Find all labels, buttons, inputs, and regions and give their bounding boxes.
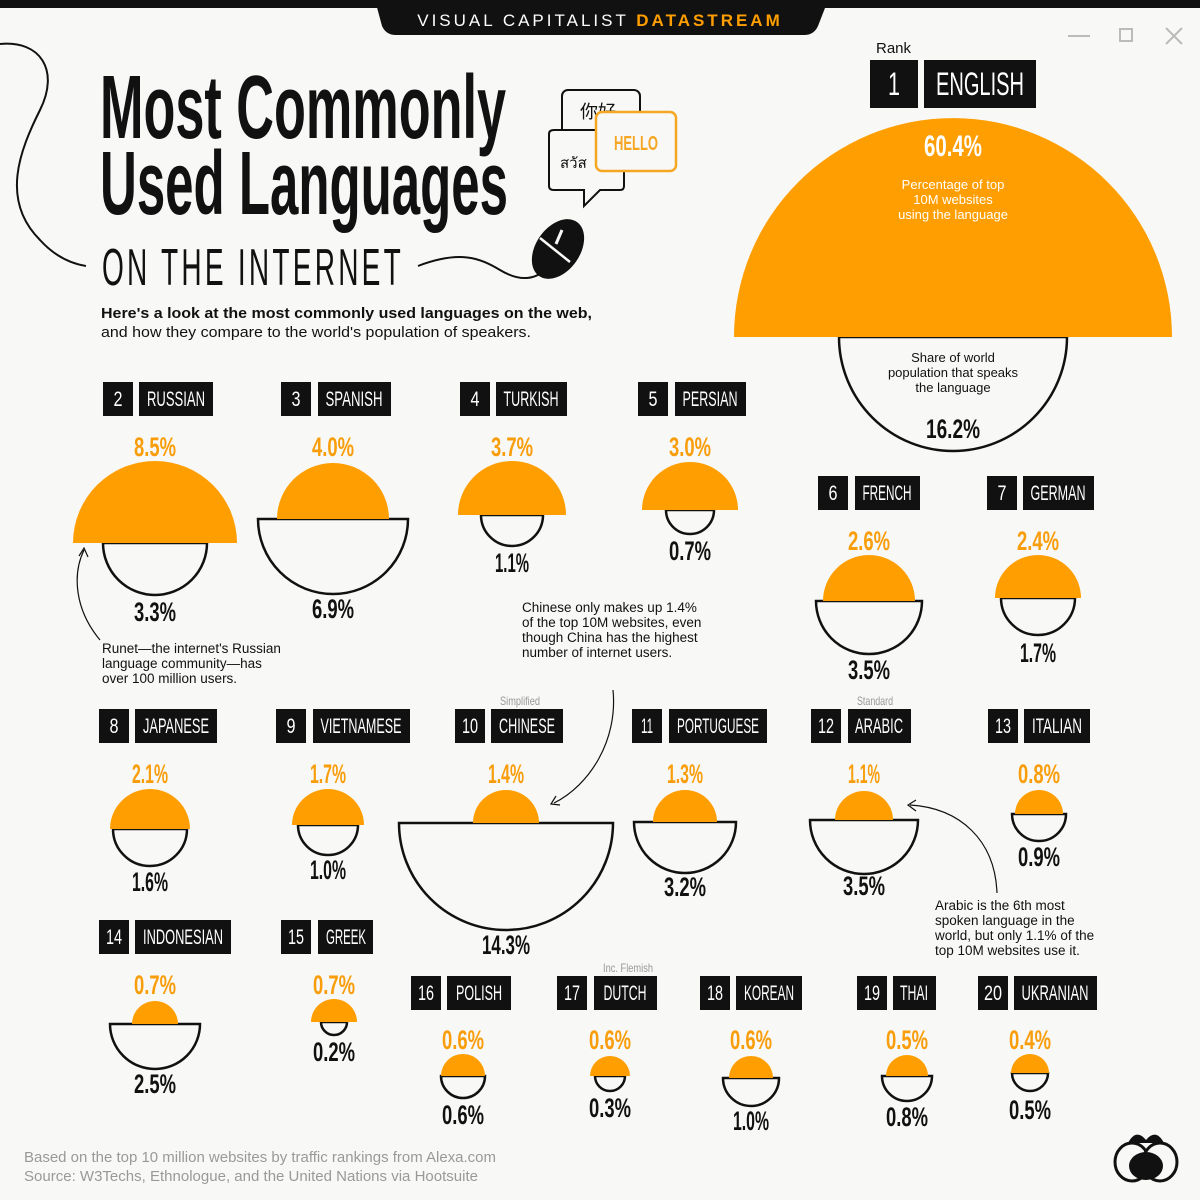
window controls [1068,28,1182,44]
callout: arabic: top 10M websites use it. [935,943,1080,958]
footer source text: Source: W3Techs, Ethnologue, and the United Nations via Hootsuite [24,1168,478,1185]
panel: turkish: TURKISH [504,388,558,411]
callout: runet: over 100 million users. [102,671,237,686]
subtitle text: and how they compare to the world's population of speakers. [101,324,531,341]
callout: chinese: though China has the highest [522,630,698,645]
panel: greek: 15 [288,926,304,949]
panel: chinese: Simplified [500,694,540,708]
panel: russian: 3.3% [134,597,176,627]
panel: italian: 13 [995,715,1011,738]
panel: chinese: 1.4% [488,759,524,789]
panel: dutch: 17 [564,982,580,1005]
panel: russian [73,382,237,627]
icon: logo [1115,1135,1177,1181]
panel: japanese: 8 [110,715,118,738]
callout: chinese [522,600,701,805]
panel: english: Percentage of top [902,177,1004,192]
panel: korean [700,976,802,1136]
panel: english: 1 [888,66,900,102]
decorative cable line [0,44,86,266]
callout: arabic: spoken language in the [935,913,1075,928]
panel: spanish: SPANISH [326,388,382,411]
panel: chinese: 14.3% [482,930,530,960]
panel: persian: 3.0% [669,432,711,462]
panel: english: ENGLISH [936,66,1024,102]
panel: korean: 0.6% [730,1025,772,1055]
panel: dutch: Inc. Flemish [603,961,653,975]
panel: italian: 0.8% [1018,759,1060,789]
panel: italian: 0.9% [1018,842,1060,872]
panel: indonesian: 0.7% [134,970,176,1000]
panel: english: the language [915,380,991,395]
subtitle text: Here's a look at the most commonly used languages on the web, [101,305,592,322]
panel: german: 2.4% [1017,526,1059,556]
icon: speech bubbles and mouse: HELLO [614,133,658,155]
panel: dutch: 0.3% [589,1093,631,1123]
panel: persian [638,382,746,566]
panel: thai [857,976,936,1132]
panel: english: using the language [898,207,1008,222]
panel: english: 16.2% [926,414,980,444]
panel: japanese: JAPANESE [143,715,209,738]
panel: english: population that speaks [888,365,1019,380]
panel: arabic: Standard [857,694,893,708]
panel: turkish: 3.7% [491,432,533,462]
panel: thai: 19 [864,982,880,1005]
panel: greek: 0.2% [313,1037,355,1067]
callout: chinese: Chinese only makes up 1.4% [522,600,697,615]
icon: speech bubbles and mouse: 你好 [580,98,616,124]
title: Most Commonly [100,58,506,158]
panel: english [734,40,1172,451]
panel: turkish [458,382,567,578]
panel: arabic [810,694,918,901]
panel: korean: 1.0% [733,1106,769,1136]
panel: dutch: DUTCH [604,982,646,1005]
panel: greek: GREEK [326,926,366,949]
panel: arabic: 3.5% [843,871,885,901]
title [100,58,508,297]
panel: italian: ITALIAN [1032,715,1082,738]
panel: arabic: 12 [818,715,834,738]
panel: thai: 0.5% [886,1025,928,1055]
panel: portuguese: 1.3% [667,759,703,789]
panel: dutch: 0.6% [589,1025,631,1055]
panel: ukranian: 0.5% [1009,1095,1051,1125]
panel: korean: KOREAN [744,982,794,1005]
panel: russian: RUSSIAN [147,388,205,411]
panel: persian: 0.7% [669,536,711,566]
panel: polish: 16 [418,982,434,1005]
panel: spanish: 3 [292,388,300,411]
panel: greek: 0.7% [313,970,355,1000]
panel: polish [411,976,511,1130]
panel: french: 2.6% [848,526,890,556]
panel: german [987,476,1094,668]
footer source text [24,1149,496,1185]
title: Used Languages [100,134,508,234]
panel: turkish: 1.1% [495,548,529,578]
panel: chinese: 10 [462,715,478,738]
panel: german: 1.7% [1020,638,1056,668]
panel: ukranian: UKRANIAN [1022,982,1088,1005]
panel: japanese: 2.1% [132,759,168,789]
panel: indonesian: INDONESIAN [143,926,223,949]
panel: french: FRENCH [862,482,912,505]
panel: portuguese: 11 [641,715,653,738]
header bar: VISUAL CAPITALIST DATASTREAM [417,11,783,30]
panel: german: 7 [998,482,1006,505]
icon: speech bubbles and mouse [521,90,676,289]
panel: thai: THAI [900,982,928,1005]
panel: french [816,476,922,685]
panel: english: 10M websites [913,192,993,207]
panel: japanese: 1.6% [132,867,168,897]
callout: runet [77,548,281,686]
callout: chinese: of the top 10M websites, even [522,615,701,630]
panel: chinese [399,694,613,960]
panel: ukranian [978,976,1097,1125]
header bar [0,0,1200,35]
panel: spanish: 6.9% [312,594,354,624]
title: ON THE INTERNET [102,239,404,297]
panel: portuguese: 3.2% [664,872,706,902]
panel: portuguese [632,709,767,902]
panel: turkish: 4 [470,388,480,411]
callout: arabic: world, but only 1.1% of the [934,928,1094,943]
icon: speech bubbles and mouse: สวัส [560,154,587,172]
subtitle text [101,305,592,341]
panel: russian: 2 [114,388,122,411]
panel: spanish [258,382,408,624]
callout: runet: language community—has [102,656,262,671]
panel: french: 6 [828,482,838,505]
panel: spanish: 4.0% [312,432,354,462]
panel: english: Share of world [911,350,995,365]
panel: italian [988,709,1090,872]
panel: indonesian: 2.5% [134,1069,176,1099]
panel: dutch [557,961,657,1123]
footer source text: Based on the top 10 million websites by traffic rankings from Alexa.com [24,1149,496,1166]
callout: chinese: number of internet users. [522,645,672,660]
panel: indonesian [99,920,231,1099]
panel: polish: 0.6% [442,1025,484,1055]
panel: arabic: ARABIC [855,715,903,738]
panel: arabic: 1.1% [848,759,880,789]
panel: english: 60.4% [924,130,982,163]
panel: russian: 8.5% [134,432,176,462]
panel: polish: 0.6% [442,1100,484,1130]
panel: korean: 18 [707,982,723,1005]
panel: chinese: CHINESE [499,715,555,738]
panel: thai: 0.8% [886,1102,928,1132]
panel: vietnamese [276,709,410,885]
panel: vietnamese: 1.0% [310,855,346,885]
panel: japanese [99,709,217,897]
panel: french: 3.5% [848,655,890,685]
panel: english: Rank [876,40,912,57]
panel: persian: 5 [648,388,658,411]
callout: arabic: Arabic is the 6th most [935,898,1065,913]
panel: persian: PERSIAN [682,388,738,411]
panel: vietnamese: VIETNAMESE [320,715,402,738]
panel: vietnamese: 1.7% [310,759,346,789]
panel: ukranian: 0.4% [1009,1025,1051,1055]
panel: ukranian: 20 [984,982,1002,1005]
callout: arabic [908,800,1094,958]
panel: german: GERMAN [1030,482,1086,505]
panel: polish: POLISH [456,982,502,1005]
panel: portuguese: PORTUGUESE [677,715,759,738]
panel: indonesian: 14 [106,926,122,949]
panel: greek [281,920,373,1067]
callout: runet: Runet—the internet's Russian [102,641,281,656]
panel: vietnamese: 9 [286,715,296,738]
